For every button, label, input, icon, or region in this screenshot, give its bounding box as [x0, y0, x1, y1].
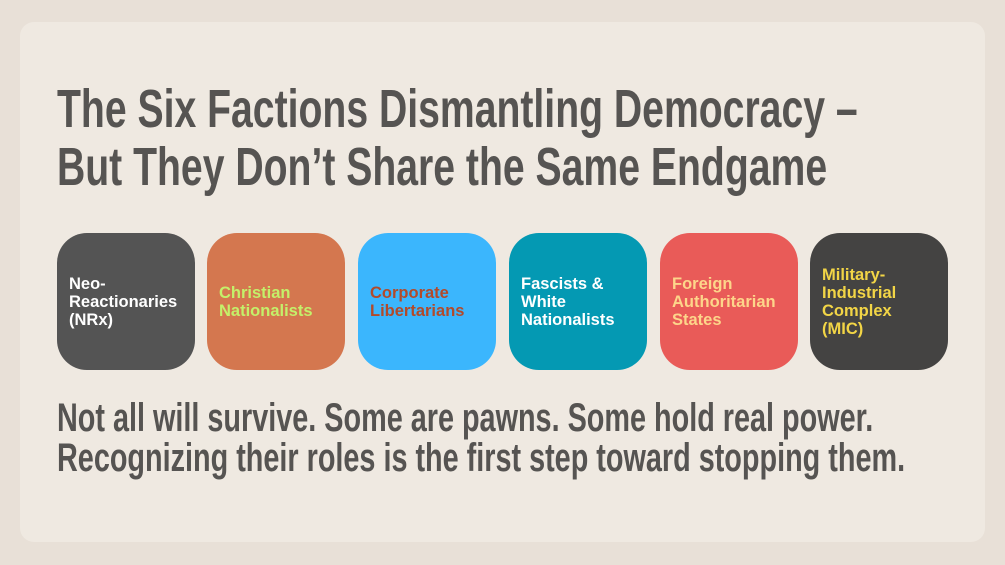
tiles row — [57, 233, 948, 370]
tile: Foreign Authoritarian States: Authoritarian — [672, 292, 776, 310]
tile: Fascists: Fascists & — [521, 274, 604, 292]
bottom statement: Not all will survive. Some are pawns. Some hold real power. — [57, 396, 873, 440]
tile: Fascists: White — [521, 292, 566, 310]
tile: Christian Nationalists: Christian — [219, 284, 291, 302]
title: But They Don’t Share the Same Endgame — [57, 137, 827, 197]
tile: Corporate Libertarians — [358, 233, 496, 370]
bottom statement: Recognizing their roles is the first step toward stopping them. — [57, 436, 905, 480]
tile: MIC — [810, 233, 948, 370]
title — [57, 79, 858, 197]
tile: Christian Nationalists — [207, 233, 345, 370]
tile: Corporate Libertarians: Corporate — [370, 284, 449, 302]
tile: NRx: Reactionaries — [69, 292, 177, 310]
tile: MIC: Complex — [822, 302, 892, 320]
tile: NRx: (NRx) — [69, 310, 113, 328]
tile: MIC: (MIC) — [822, 320, 863, 338]
tile: Corporate Libertarians: Libertarians — [370, 302, 464, 320]
tile: NRx: Neo- — [69, 274, 106, 292]
tile: Foreign Authoritarian States — [660, 233, 798, 370]
tile: Foreign Authoritarian States: States — [672, 310, 722, 328]
tile: MIC: Military- — [822, 266, 885, 284]
tile: MIC: Industrial — [822, 284, 896, 302]
tile: Fascists — [509, 233, 647, 370]
title: The Six Factions Dismantling Democracy – — [57, 79, 858, 139]
tile: NRx — [57, 233, 195, 370]
tile: Foreign Authoritarian States: Foreign — [672, 274, 732, 292]
bottom statement — [57, 396, 905, 480]
tile: Christian Nationalists: Nationalists — [219, 302, 313, 320]
tile: Fascists: Nationalists — [521, 310, 615, 328]
